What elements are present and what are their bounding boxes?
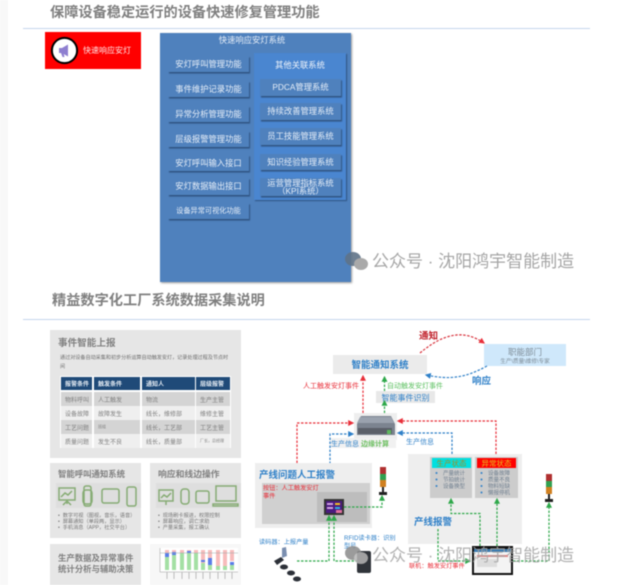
panel title [58,553,134,574]
icons: board watch tablet phone [57,484,138,508]
feature list: • 数字可视（图视，音乐，语音） [58,513,135,519]
arrow: automatic andon event: 自动触发安灯事件 [387,381,443,390]
rfid label: RFID读卡器：识别 [344,535,396,542]
panel: line alarm [408,454,522,544]
card: production status: 节拍统计 [443,476,466,484]
arrow: tablet to abnormal status [496,499,498,546]
card: abnormal status [475,457,518,498]
node: smart event recognition [376,391,435,403]
event table: 厂长，总经理 [200,438,224,443]
button list: functions: 运营管理指标系统 [267,178,334,188]
panel: line alarm: 产线报警 [414,516,453,528]
event table: 工艺问题 [65,426,89,432]
panel: smart call notification [50,463,141,538]
event table: 层级报警 [200,382,224,388]
stacked bar chart [158,547,239,580]
panel title: 智能呼叫通知系统 [58,469,125,479]
icon: edge computer [354,413,397,440]
panel: response and line-side operation [150,463,241,538]
left margin strip [0,0,8,585]
node: functional departments [484,344,566,366]
card: abnormal status: 设备故障 [488,469,511,477]
arrow: left red line [297,423,353,463]
panel: related systems [254,53,346,200]
button list: functions: 事件维护记录功能 [175,84,242,94]
node: functional departments: 生产\质量\维修\专家 [500,357,550,365]
panel: manual line alarm: 事件 [263,492,275,500]
event table: 班组 [98,424,106,429]
button list: functions: 层级报警管理功能 [175,134,242,144]
feature list: • 产量采集，报工确认 [158,525,209,531]
arrow: line alarm to tablet [438,529,470,561]
button list: functions: PDCA管理系统 [272,82,329,92]
arrow: respond: 响应 [472,375,492,387]
icon: scanners [274,547,301,582]
watermark: top: 公众号 · 沈阳鸿宇智能制造 [372,252,574,271]
icon: rfid reader [357,551,371,573]
arrow: respond [426,366,492,387]
arrow: notify [419,330,484,353]
button list: functions: 安灯呼叫输入接口 [175,158,242,168]
panel: event reporting [50,330,241,458]
event table: 故障发生 [98,412,122,418]
button list: functions: 其他关联系统 [275,60,325,70]
button list: functions: 持续改善管理系统 [267,106,334,116]
panel title: 快速响应安灯系统 [219,35,285,45]
card: abnormal status: 异常状态 [482,458,512,468]
card: production status: 设备换型 [443,482,466,490]
arrow: scanner to terminal [297,516,329,561]
button list: functions: 安灯数据输出接口 [175,181,242,191]
description: 通过对设备自动采集和初步分析运算自动触发安灯，记录处理过程及节点时间 [60,355,228,370]
node: smart event recognition: 智能事件识别 [382,392,430,402]
event table: 报警条件 [65,382,89,388]
arrow: terminal to tower [344,496,382,507]
icon: megaphone [50,36,79,65]
panel title: 统计分析与辅助决策 [58,564,133,574]
edge computing label [330,438,396,448]
button list: functions: （KPI系统） [277,186,324,196]
card: abnormal status: 质量不良 [488,476,511,484]
online trigger label: 联机：触发安灯事件 [409,562,465,570]
node: smart notification system [333,355,427,374]
card: abnormal status: 物料短缺 [488,482,511,490]
edge computing label: 生产信息 [331,439,359,448]
event table: 触发条件 [98,382,122,388]
red andon badge [45,32,141,69]
button list: functions: 异常分析管理功能 [175,109,242,119]
icon: left signal tower [379,467,387,495]
panel title: 事件智能上报 [58,338,116,349]
node: smart notification system: 智能通知系统 [351,359,409,371]
event table: 生产主管 [200,398,224,404]
event table: 线长，质量部 [146,440,182,446]
icons: board watch tablet laptop [157,484,240,508]
panel: manual line alarm: 产线问题人工报警 [259,469,336,481]
button list: functions [168,57,343,222]
feature list: • 现场刷卡报进，权限控制 [158,513,220,519]
feature list [58,512,135,531]
event table: 线长，工艺部 [146,426,182,432]
event table [60,376,231,448]
arrow: manual andon event [303,376,363,413]
arrow: edge to recognition [384,401,386,413]
feature list: • 屏幕通知（单段两，显示） [58,519,125,525]
button list: functions: 安灯呼叫管理功能 [175,59,242,69]
arrow: right blue line [398,433,452,458]
panel title: 响应和线边操作 [158,469,220,479]
arrow: right red line [398,421,496,458]
button list: functions: 员工技能管理系统 [267,131,334,141]
card: production status: 生产状态 [436,458,467,468]
arrow: notify: 通知 [419,330,438,342]
event table: 设备故障 [65,412,89,418]
button list: functions: 知识经验管理系统 [267,157,334,167]
node: functional departments: 职能部门 [508,347,542,357]
event table: 人工触发 [98,398,122,404]
icon: tablet [472,546,513,575]
feature list: • 屏幕响应，调亡求助 [158,519,209,525]
event table: 工艺主管 [200,426,224,432]
card: production status [430,457,472,498]
heading: data collection: 精益数字化工厂系统数据采集说明 [52,293,265,309]
feature list [158,512,220,531]
panel: rapid response andon system [160,33,351,282]
panel title: 生产数据及异常事件 [58,553,133,563]
arrow: rfid to terminal [334,516,358,561]
panel: statistics and decisions [50,544,141,585]
arrow: manual andon event: 人工触发安灯事件 [303,381,359,390]
scanner label: 读码器：上报产量 [259,538,308,546]
card: abnormal status: 懒报停机 [488,488,511,496]
event table: 质量问题 [65,440,89,446]
feature list: • 手机消息（APP，社交平台） [58,525,130,531]
event table: 物料呼叫 [65,398,89,404]
icon: alarm terminal [324,499,344,515]
arrow: automatic andon event [384,377,443,391]
edge computing label: 边缘计算 [361,439,389,448]
event table: 发生不良 [98,440,122,446]
card: production status: 产量统计 [443,469,466,477]
event table: 线长，维修部 [146,412,182,418]
panel: manual line alarm [255,463,372,528]
arrow: right blue line: 生产信息 [406,437,434,446]
heading: device rapid repair: 保障设备稳定运行的设备快速修复管理功能 [50,5,320,21]
arrow: tablet to right tower [513,503,549,561]
arrow: left blue line [330,434,353,500]
arrow: tablet to production status [451,499,480,546]
button list: functions: 设备异常可视化功能 [176,206,241,215]
event table: 维修主管 [200,412,224,418]
panel: manual line alarm: 按钮：人工触发安灯 [263,484,319,492]
event table: 通知人 [146,382,164,388]
badge label: 快速响应安灯 [83,46,131,55]
event table: 物流 [146,398,158,404]
icon: right signal tower [545,474,553,502]
watermark: bottom: 公众号 · 沈阳鸿宇智能制造 [372,546,574,565]
rfid label: 型号 [344,542,356,550]
